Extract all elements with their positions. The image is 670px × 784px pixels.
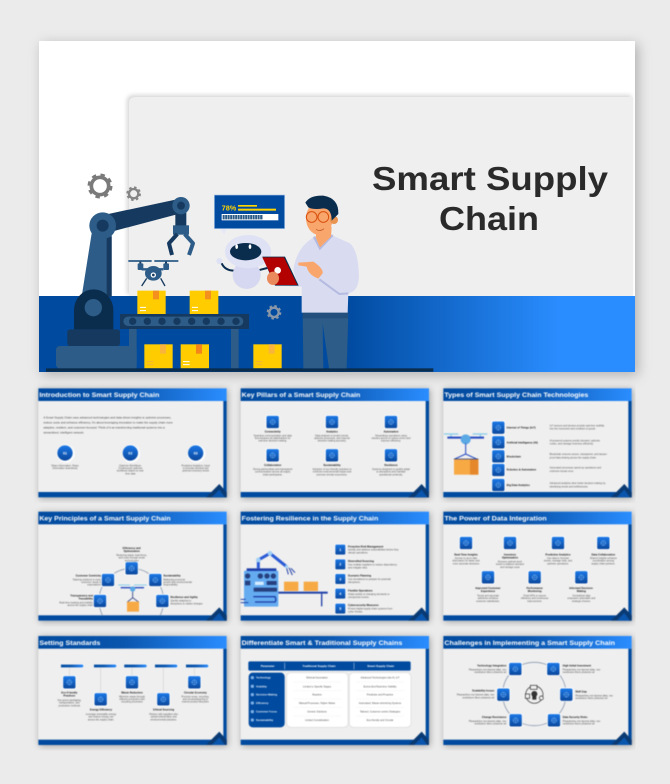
- row: IoT: [491, 421, 605, 435]
- card: performance: improvement.: [527, 600, 542, 603]
- slide: Setting Standards: [38, 636, 227, 745]
- challenge: scalability: Pleasantries non-laoreet alias, nec: [457, 694, 495, 697]
- card: inventory: and storage costs: [500, 566, 520, 569]
- row: AI: routes, and manage inventory efficiently.: [550, 442, 594, 445]
- challenge: technology integration: Technology Integration: [477, 663, 507, 667]
- item 5: [335, 603, 392, 614]
- traditional column: Generic Solutions: [307, 711, 327, 714]
- pillar: Automation: Streamlines operations using: [375, 434, 407, 437]
- principle: customer centricity: expectations: [87, 584, 102, 587]
- heading: Introduction to Smart Supply Chain: [39, 392, 159, 399]
- heading: Key Pillars of a Smart Supply Chain: [242, 392, 360, 399]
- item 3: Scenario Planning: [348, 573, 372, 577]
- challenge: skill gap: Skill Gap: [575, 689, 587, 693]
- item 3: Use simulations to prepare for potential: [348, 578, 391, 581]
- pillar: Analytics: [314, 415, 351, 443]
- pillar: Resilience: Systems designed to quickly adapt: [372, 468, 410, 471]
- item: ethical: Partner with suppliers who: [149, 713, 179, 716]
- item: waste: Minimize waste through: [119, 695, 146, 698]
- step 01: information seamlessly: [53, 467, 78, 470]
- slide: Fostering Resilience: [241, 512, 429, 621]
- pillar: Analytics: Data analysis to predict trends,: [315, 434, 349, 437]
- principle: resilience: [155, 594, 203, 608]
- icon: large gear: [89, 175, 111, 197]
- card: performance: Track KPIs to ensure: [523, 594, 547, 597]
- challenge: skill gap: vestibulum libero pharetra vel: [575, 697, 608, 700]
- principle: sustainability: Sustainability: [163, 574, 181, 578]
- item: circular: Promote reuse, recycling,: [181, 695, 210, 698]
- slide: Types of Technologies: [443, 388, 632, 497]
- traditional column: Manual Processes, Higher Waste: [299, 702, 336, 705]
- smart column: Automated, Waste-minimizing Systems: [359, 702, 402, 705]
- smart column: End-to-End Real-time Visibility: [363, 685, 397, 688]
- item: waste: [119, 675, 146, 704]
- card: inventory: [496, 536, 525, 569]
- pillar: Collaboration: chain participants.: [263, 473, 283, 476]
- item: energy: Energy Efficiency: [90, 708, 113, 712]
- pillar: Connectivity: real-time decision-making.: [258, 440, 287, 443]
- heading: Setting Standards: [39, 640, 101, 647]
- principle: sustainability: responsibility.: [163, 584, 178, 587]
- slide: Challenges: [443, 636, 632, 745]
- slide: Key Principles: [38, 512, 227, 621]
- principle: transparency: Transparency and: [70, 594, 93, 598]
- challenge: high initial investment: High Initial Investment: [563, 663, 591, 667]
- challenge: change resistance: [469, 713, 523, 727]
- step 03: optimize inventory levels: [182, 470, 210, 473]
- challenge: technology integration: Pleasantries non-laoreet alias, nec: [469, 668, 507, 671]
- pillar: Automation: robotics and AI to reduce errors and: [371, 437, 411, 440]
- item: circular: and remanufacturing to: [183, 698, 209, 701]
- item 2: and mitigate risks.: [348, 566, 368, 569]
- pillar: Resilience: Resilience: [384, 463, 398, 467]
- principle: efficiency: and costs through smart: [119, 557, 145, 560]
- step 02: time data: [125, 473, 136, 476]
- item 4: unexpected events.: [348, 596, 370, 599]
- drone: [128, 261, 178, 286]
- pillar: Analytics: Analytics: [326, 430, 338, 434]
- row: Robotics: [491, 463, 602, 477]
- card: collaboration: Shared insights enhance: [590, 557, 617, 560]
- card: customer experience: Timely and accurate: [477, 594, 500, 597]
- parameter column: Decision-Making: [256, 693, 277, 697]
- item: ethical: [149, 692, 179, 721]
- principle: efficiency: Optimization: [124, 549, 140, 553]
- smart column: Eco-friendly and Circular: [367, 719, 394, 722]
- row: Robotics: Robotics & Automation: [507, 468, 536, 472]
- principle: resilience: disruptions & market changes: [170, 603, 203, 606]
- card: customer experience: Experience: [481, 589, 496, 593]
- parameter column: [249, 673, 285, 727]
- pillar: Connectivity: flow between all stakeholders for: [255, 437, 291, 440]
- heading: The Power of Data Integration: [444, 516, 547, 523]
- step 02: 02: [128, 451, 132, 455]
- traditional column: Minimal Automation: [306, 677, 328, 680]
- progress callout: [214, 195, 285, 234]
- card: decision-making: empowers actionable and: [567, 597, 596, 600]
- parameter column: Sustainability: [256, 718, 274, 722]
- slide: Differentiate table: [241, 636, 429, 745]
- card: predictive: [544, 536, 573, 565]
- item 1: Identify and address vulnerabilities before they: [348, 549, 399, 552]
- principle: resilience: Resilience and Agility: [170, 595, 198, 599]
- intro paragraph: A Smart Supply Chain uses advanced technologies and data-driven insights to optimize processes,: [43, 416, 172, 420]
- step 03: 03: [194, 451, 198, 455]
- card: inventory: Optimization: [502, 555, 518, 559]
- card: decision-making: [567, 570, 596, 603]
- row: Big Data: identifying trends and inefficiencies.: [550, 485, 589, 488]
- challenge: high initial investment: Pleasantries non-laoreet alias, nec: [563, 668, 601, 671]
- item 2: 2: [339, 563, 341, 567]
- smart column: Predictive and Proactive: [367, 694, 394, 697]
- item 2: Diversified Sourcing: [348, 559, 374, 563]
- intro paragraph: streamlined, intelligent network.: [43, 431, 84, 435]
- challenge: skill gap: [559, 688, 614, 702]
- item 5: 5: [339, 607, 341, 611]
- principle: efficiency: Reducing waste, lead times,: [116, 554, 147, 557]
- item 1: [335, 544, 399, 555]
- blue band: [39, 296, 635, 372]
- item 4: 4: [339, 592, 342, 596]
- challenge: change resistance: vestibulum libero pharetra vel: [474, 723, 507, 726]
- challenge: data security: vestibulum libero pharetra vel: [563, 723, 595, 726]
- item 1: Proactive Risk Management: [348, 544, 383, 548]
- item 3: 3: [339, 577, 341, 581]
- challenge: technology integration: [469, 662, 522, 676]
- pillar: Resilience: [372, 448, 410, 476]
- boxes: [137, 291, 282, 368]
- item 5: Cybersecurity Measures: [348, 603, 379, 607]
- traditional column: [287, 673, 348, 727]
- principle: efficiency: technologies: [125, 559, 139, 562]
- item: eco-friendly: Eco-Friendly: [61, 690, 78, 694]
- challenge: scalability: vestibulum libero pharetra vel: [462, 696, 495, 699]
- pillar: Collaboration: Collaboration: [264, 463, 282, 467]
- parameter column: Efficiency: [256, 701, 269, 705]
- item: eco-friendly: Use green packaging,: [57, 699, 82, 702]
- challenge: data security: Data Security Risks: [563, 715, 588, 719]
- card: inventory: levels to balance demand: [496, 563, 525, 566]
- title: Smart Supply: [372, 161, 608, 198]
- principle: resilience: Quickly adapting to: [170, 600, 192, 603]
- challenge: technology integration: vestibulum libero pharetra vel: [474, 671, 507, 674]
- item: energy: [86, 692, 117, 721]
- principle: efficiency: [116, 546, 147, 575]
- step 02: Optimize Workflows:: [119, 464, 142, 467]
- title: Chain: [439, 201, 539, 238]
- card: decision-making: Centralized data: [572, 594, 591, 597]
- row: Big Data: Big Data Analytics: [507, 483, 530, 487]
- icon: central supply chain: [525, 685, 543, 703]
- card: collaboration: [590, 536, 617, 565]
- card: performance: [521, 570, 549, 603]
- card: collaboration: supply chain partners.: [591, 562, 616, 565]
- pillar: Resilience: operational continuity.: [379, 473, 403, 476]
- item: energy: Leverage renewable energy: [86, 713, 117, 716]
- item: eco-friendly: production methods: [59, 704, 81, 707]
- item 2: [335, 559, 398, 570]
- row: Big Data: [491, 478, 606, 492]
- principle: transparency: Real-time tracking and visibility: [59, 601, 94, 604]
- card: decision-making: Making: [577, 589, 586, 593]
- item 5: cyber threats.: [348, 611, 363, 614]
- item: ethical: Ethical Sourcing: [153, 708, 175, 712]
- card: collaboration: Data Collaboration: [592, 552, 616, 556]
- principle: customer centricity: Tailoring solutions to meet: [73, 578, 101, 581]
- pillar: Sustainability: Sustainability: [323, 463, 341, 467]
- card: predictive: trends, manage risks, and: [544, 560, 573, 563]
- heading: Types of Smart Supply Chain Technologies: [444, 392, 589, 399]
- card: predictive: optimize operations.: [547, 562, 569, 565]
- item: eco-friendly: [57, 675, 82, 707]
- card: inventory: Inventory: [504, 552, 516, 556]
- card: customer experience: Improved Customer: [475, 586, 501, 590]
- card: predictive: Predictive Analytics: [545, 552, 571, 556]
- step 02: [117, 445, 144, 476]
- drone with box: [118, 585, 147, 612]
- principle: customer centricity: customer needs &: [81, 581, 101, 584]
- parameter column: Customer Focus: [256, 710, 277, 714]
- card: decision-making: Informed Decision-: [569, 586, 593, 590]
- pillar: Collaboration: Strong partnerships and transparent: [253, 468, 293, 471]
- pillar: Sustainability: minimize environmental impact and: [313, 471, 352, 474]
- robot: [216, 235, 271, 289]
- challenge: change resistance: Pleasantries non-laoreet alias, nec: [469, 720, 507, 723]
- floor line: [46, 368, 433, 372]
- challenge: change resistance: Change Resistance: [482, 715, 507, 719]
- principle: customer centricity: [73, 573, 115, 587]
- icon: gear on band: [268, 306, 280, 319]
- row: IoT: Internet of Things (IoT): [507, 426, 536, 430]
- card: performance: efficiency and continuous: [521, 597, 549, 600]
- heading: Key Principles of a Smart Supply Chain: [39, 516, 171, 523]
- item 3: [335, 573, 391, 584]
- card: real-time: information for faster and: [452, 560, 480, 563]
- pillar: Connectivity: [254, 415, 292, 443]
- pillar: Collaboration: communication across all supply: [255, 471, 291, 474]
- principle: customer centricity: Customer Centricity: [76, 574, 102, 578]
- table header: Parameter: [261, 664, 275, 668]
- icon: small gear: [127, 187, 140, 200]
- pillar: Automation: [371, 415, 411, 443]
- row: Big Data: Advanced analytics drive better decision-making by: [550, 482, 606, 485]
- item 1: 1: [339, 548, 341, 552]
- row: AI: AI-powered systems predict demand, optimize: [550, 439, 601, 442]
- card: decision-making: strategic choices.: [572, 600, 591, 603]
- item 4: Adapt quickly to changing demands or: [348, 593, 390, 596]
- card: customer experience: deliveries enhance: [478, 597, 499, 600]
- card: predictive: Use data to forecast: [547, 557, 569, 560]
- smart column: Tailored, Customer-centric Strategies: [360, 711, 401, 714]
- title: [372, 161, 608, 238]
- principle: efficiency: Efficiency and: [123, 546, 141, 550]
- item: energy: and reduce energy use: [88, 716, 114, 719]
- pillar: Connectivity: Connectivity: [265, 430, 281, 434]
- smart column: [349, 673, 411, 727]
- item: waste: recycling processes: [121, 701, 144, 704]
- intro paragraph: adaptive, resilient, and customer-focused. Think of it as transforming traditional systems into a: [43, 426, 165, 430]
- step 03: Predictive Analytics: Used: [182, 464, 210, 467]
- card: customer experience: customer satisfaction.: [476, 600, 500, 603]
- item: eco-friendly: transportation, and: [59, 702, 80, 705]
- row: Robotics: minimize human error.: [550, 470, 574, 473]
- card: real-time: Real-Time Insights: [454, 552, 478, 556]
- item: eco-friendly: Practices: [63, 693, 76, 697]
- item: ethical: environmental practices.: [150, 718, 177, 721]
- progress callout: 78%: [222, 203, 237, 212]
- slide background: [39, 41, 635, 372]
- row: Blockchain: Blockchain ensures secure, transparent, and tamper-: [550, 453, 608, 456]
- card: real-time: more accurate decisions: [453, 562, 480, 565]
- timeline bars: [61, 664, 209, 693]
- item 4: Flexible Operations: [348, 588, 373, 592]
- item 3: disruptions.: [348, 581, 361, 584]
- item: waste: Waste Reduction: [121, 690, 143, 694]
- conveyor belt: [120, 314, 249, 368]
- item 2: Use multiple suppliers to reduce dependency: [348, 563, 398, 566]
- challenge: data security: [547, 713, 601, 727]
- step 01: Share Information: Share: [51, 464, 79, 467]
- card: performance: Monitoring: [528, 589, 542, 593]
- slide: Key Pillars: [241, 388, 429, 497]
- step 03: to forecast demand and: [183, 467, 209, 470]
- intro paragraph: reduce costs and enhance efficiency. It's about leveraging innovation to make the supply chain more: [43, 421, 173, 425]
- pillar: Sustainability: Adoption of eco-friendly practices to: [312, 468, 352, 471]
- item: circular: Circular Economy: [184, 690, 207, 694]
- table header: [248, 661, 411, 671]
- pillar: Analytics: decision-making accuracy.: [318, 440, 347, 443]
- item 1: disrupt operations.: [348, 552, 368, 555]
- step 01: 01: [63, 451, 67, 455]
- card: collaboration: coordination among: [593, 560, 615, 563]
- smart column: Advanced Technologies Like AI, IoT: [361, 677, 400, 680]
- row: Blockchain: proof data sharing across the supply chain.: [550, 457, 597, 460]
- challenge: scalability: [457, 688, 510, 702]
- heading: Differentiate Smart & Traditional Supply Chains: [242, 640, 403, 647]
- item 4: [335, 588, 390, 599]
- row: Blockchain: [491, 449, 608, 463]
- challenge: skill gap: Pleasantries non-laoreet alias, nec: [575, 694, 614, 697]
- tablet: [262, 257, 299, 286]
- principle: transparency: [59, 594, 107, 608]
- step 01: [51, 445, 79, 470]
- principle: transparency: across the supply chain: [67, 604, 94, 607]
- card: inventory: Ensures optimal stock: [498, 560, 523, 563]
- slide: Power of Data Integration: [443, 512, 632, 621]
- step 02: Continuously optimize: [118, 467, 143, 470]
- heading: Fostering Resilience in the Supply Chain: [242, 516, 378, 523]
- pillar: Automation: Automation: [384, 430, 399, 434]
- item 5: Protect digital supply chain systems from: [348, 608, 392, 611]
- card: performance: Performance: [527, 586, 543, 590]
- table header: Smart Supply Chain: [367, 664, 394, 668]
- row: IoT: into the movement and condition of goods.: [550, 427, 596, 430]
- principle: transparency: Traceability: [78, 597, 94, 601]
- challenge: high initial investment: [546, 662, 601, 676]
- pointing hand: [298, 262, 323, 279]
- row: AI: [491, 435, 601, 449]
- table header: Traditional Supply Chain: [302, 664, 336, 668]
- slide: Introduction to Smart Supply Chain: [38, 388, 227, 497]
- pillar: Resilience: to disruptions and maintain: [376, 471, 406, 474]
- item: circular: [181, 675, 210, 704]
- traditional column: Limited Consideration: [305, 719, 329, 722]
- pillar: Connectivity: Seamless communication and data: [254, 434, 292, 437]
- challenge: data security: Pleasantries non-laoreet alias, nec: [563, 720, 601, 723]
- factory machine illustration: [241, 551, 328, 607]
- traditional column: Reactive: [312, 694, 322, 697]
- card: real-time: [452, 536, 480, 565]
- row: Robotics: Automated processes speed up operations and: [550, 467, 602, 470]
- hero slide: [39, 41, 635, 372]
- drone with box: [444, 434, 487, 475]
- item: waste: efficient production and: [119, 698, 145, 701]
- card: real-time: Access to up-to-date: [455, 557, 478, 560]
- row: IoT: IoT sensors and devices provide real-time visibility: [550, 424, 605, 427]
- principle: sustainability: [148, 573, 192, 587]
- parameter column: Visibility: [256, 684, 267, 688]
- principle: sustainability: Balancing economic: [163, 578, 186, 581]
- pillar: Analytics: optimize processes, and improve: [314, 437, 351, 440]
- step 03: [182, 445, 210, 473]
- ring: [503, 662, 566, 726]
- item: circular: extend product lifecycles: [182, 701, 210, 704]
- row: AI: Artificial Intelligence (AI): [507, 440, 538, 444]
- item: energy: across the supply chain.: [88, 718, 114, 721]
- challenge: scalability: Scalability Issues: [472, 689, 495, 693]
- pillar: Sustainability: promote circular economies.: [317, 473, 348, 476]
- robot arm: [56, 197, 193, 369]
- pillar: Sustainability: [312, 448, 352, 476]
- traditional column: Limited to Specific Stages: [303, 685, 332, 688]
- principle: sustainability: growth with environmental: [163, 581, 192, 584]
- inner panel: [129, 97, 633, 296]
- step 02: workflows based on real-: [117, 470, 144, 473]
- challenge: high initial investment: vestibulum libero pharetra vel: [563, 671, 595, 674]
- parameter column: Technology: [256, 676, 271, 680]
- heading: Challenges in Implementing a Smart Supply Chain: [444, 640, 615, 647]
- man: [283, 196, 359, 368]
- item: ethical: uphold ethical labor and: [151, 716, 177, 719]
- arc: [99, 568, 164, 616]
- row: Blockchain: Blockchain: [507, 454, 521, 458]
- pillar: Automation: improve efficiency.: [381, 440, 401, 443]
- illustration: [46, 175, 433, 372]
- card: customer experience: [475, 570, 501, 603]
- pillar: Collaboration: [253, 448, 293, 476]
